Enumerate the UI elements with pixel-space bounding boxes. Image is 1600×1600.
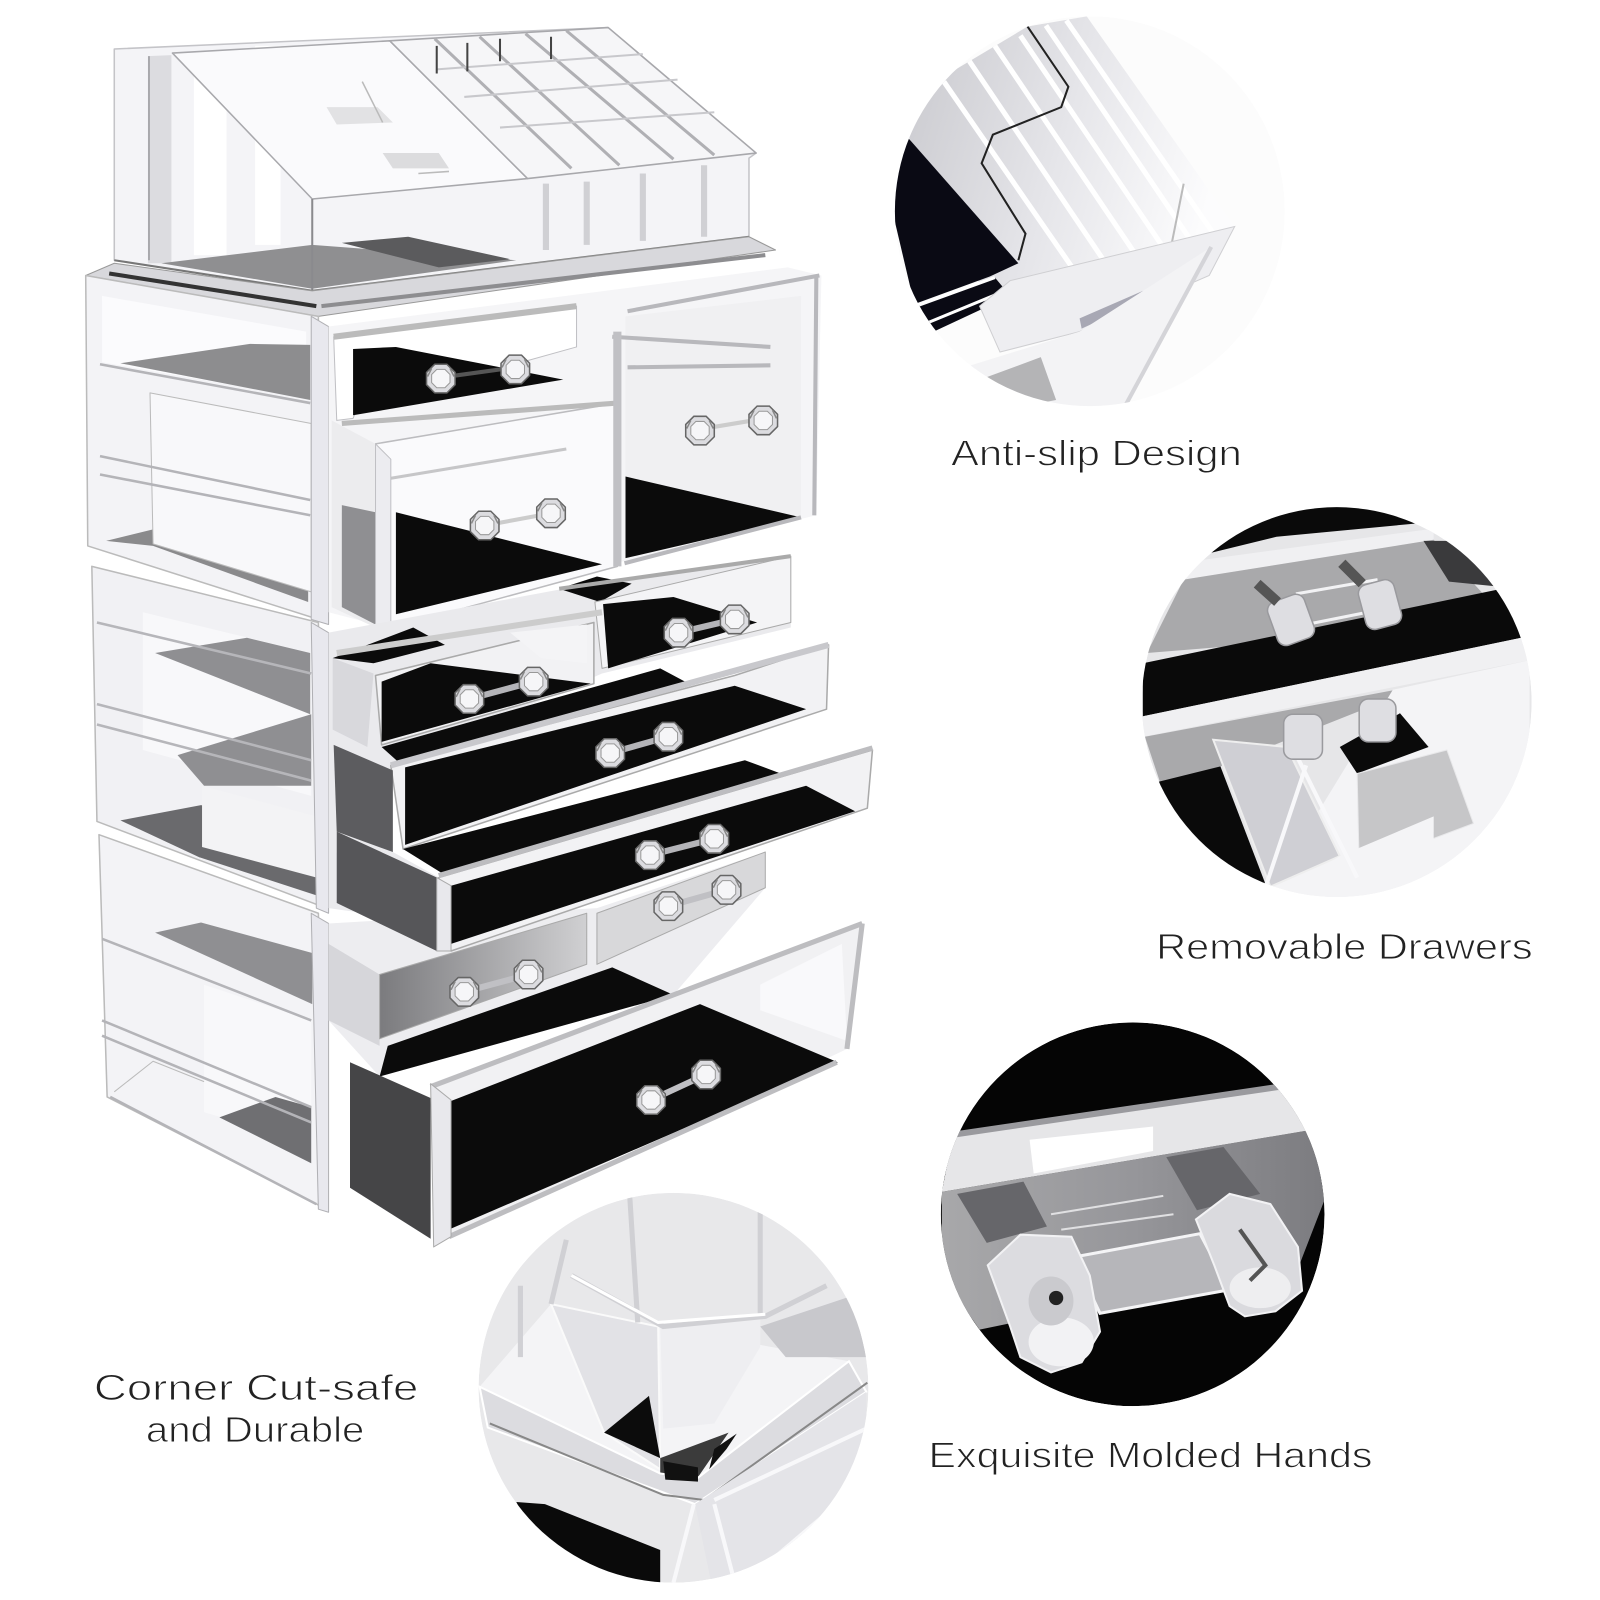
tier 2 <box>92 556 872 951</box>
label: anti-slip design: Anti-slip Design <box>951 433 1242 473</box>
tier 3 body and small drawers <box>99 835 765 1212</box>
label: corner cut-safe and durable: Corner Cut-safe <box>94 1368 418 1408</box>
label: corner cut-safe and durable: and Durable <box>146 1410 364 1450</box>
label: removable drawers: Removable Drawers <box>1156 927 1533 967</box>
handles tier 3 small <box>450 876 741 1006</box>
detail circle: corner <box>479 1193 868 1583</box>
handles tier 1 lower <box>470 406 778 540</box>
tier 3 big drawer <box>350 923 862 1247</box>
tier 1 <box>86 237 821 628</box>
top organizer <box>114 28 756 291</box>
label: exquisite molded hands: Exquisite Molded Hands <box>929 1435 1372 1475</box>
handles tier 2 <box>455 605 749 869</box>
detail circle: anti-slip corner <box>894 16 1236 406</box>
handle big drawer <box>637 1060 720 1114</box>
detail circle: removable drawers <box>1142 500 1532 897</box>
detail circle: molded handle <box>941 1022 1324 1406</box>
label: corner cut-safe and durable <box>94 1368 418 1450</box>
handles tier 1 <box>427 355 530 393</box>
product: acrylic drawer tower <box>86 28 872 1247</box>
